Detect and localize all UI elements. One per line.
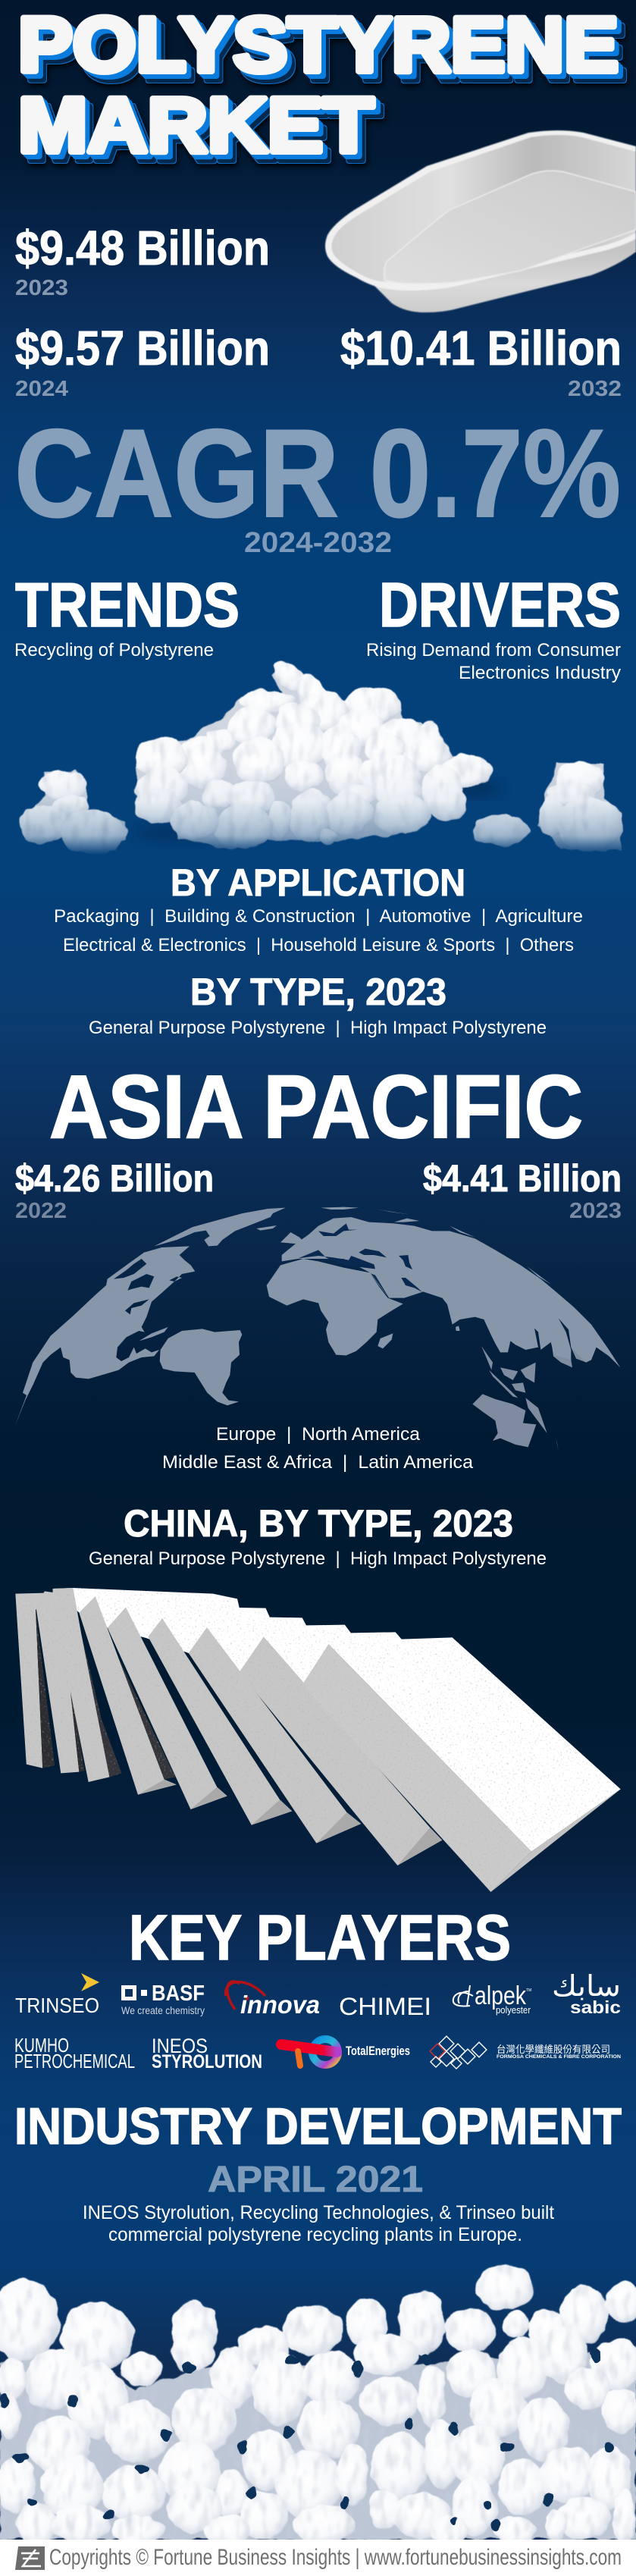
stat: 2024 market value	[15, 321, 270, 401]
stat: asia pacific 2022: 2022	[15, 1199, 67, 1223]
CAGR callout: 2024-2032	[244, 527, 392, 559]
stat: asia pacific 2023	[423, 1157, 622, 1223]
panel: trends	[14, 569, 240, 660]
logo: TotalEnergies: TotalEnergies	[346, 2044, 410, 2058]
logo: Kumho Petrochemical: KUMHO	[14, 2034, 69, 2057]
title: POLYSTYRENE	[18, 2, 619, 88]
logo: Kumho Petrochemical: PETROCHEMICAL	[14, 2050, 135, 2072]
image: pile of foam packing peanuts	[20, 655, 622, 855]
logo: Formosa Chemicals & Fibre: FORMOSA CHEMICALS & FIBRE CORPORATION	[497, 2054, 621, 2060]
logo: INEOS Styrolution: INEOS	[152, 2035, 208, 2057]
list: type segments: General Purpose Polystyrene | High Impact Polystyrene	[89, 1018, 547, 1038]
stat: 2023 market value	[15, 221, 270, 300]
logo: Alpek: polyester	[496, 2004, 531, 2016]
text block: development description: INEOS Styrolution, Recycling Technologies, & Trinseo built	[83, 2202, 554, 2223]
logo: Trinseo	[15, 1973, 99, 2017]
logo: Innova	[226, 1981, 320, 2019]
image: falling polystyrene boards	[15, 1588, 621, 1892]
image: world globe map	[15, 1207, 620, 1451]
list: china type segments: General Purpose Polystyrene | High Impact Polystyrene	[89, 1548, 547, 1569]
panel: trends: Recycling of Polystyrene	[14, 640, 214, 660]
footer: copyright bar	[0, 2540, 636, 2576]
heading: china by type: CHINA, BY TYPE, 2023	[124, 1502, 513, 1545]
title: MARKET	[18, 82, 374, 168]
logo: INEOS Styrolution	[152, 2035, 262, 2072]
stat: 2024 market value: $9.57 Billion	[15, 321, 270, 375]
list: application segments	[54, 906, 583, 955]
heading: by application: BY APPLICATION	[171, 861, 465, 904]
heading: by type: BY TYPE, 2023	[190, 971, 446, 1013]
image: foam packing peanuts strip	[0, 2264, 636, 2547]
logo: SABIC: sabic	[570, 1997, 621, 2017]
logo: SABIC	[552, 1969, 621, 2017]
list: other regions: Middle East & Africa | Latin America	[162, 1452, 473, 1473]
date: april 2021: APRIL 2021	[208, 2160, 423, 2200]
panel: drivers: Rising Demand from Consumer	[366, 640, 621, 660]
panel: drivers	[366, 569, 621, 683]
list: other regions	[162, 1424, 473, 1473]
list: application segments: Packaging | Building & Construction | Automotive | Agriculture	[54, 906, 583, 927]
title	[18, 2, 619, 168]
panel: trends: TRENDS	[15, 569, 240, 640]
icon: Fortune Business Insights logo	[15, 2546, 45, 2570]
heading: asia pacific: ASIA PACIFIC	[49, 1057, 583, 1157]
text block: development description	[83, 2202, 554, 2245]
stat: asia pacific 2022	[15, 1157, 214, 1223]
logo: BASF: We create chemistry	[121, 2004, 205, 2016]
logo: Innova: innova	[240, 1991, 320, 2019]
stat: 2023 market value: $9.48 Billion	[15, 221, 270, 275]
stat: 2023 market value: 2023	[15, 276, 68, 300]
logo: BASF: BASF	[152, 1981, 205, 2006]
logo: Alpek: TM	[526, 1988, 531, 1993]
text block: development description: commercial polystyrene recycling plants in Europe.	[108, 2224, 522, 2245]
logo: TotalEnergies	[281, 2039, 410, 2066]
stat: asia pacific 2022: $4.26 Billion	[15, 1157, 214, 1200]
stat: 2032 market value	[340, 321, 622, 401]
logo: Chimei: CHIMEI	[339, 1993, 431, 2020]
logo: Alpek: alpek	[475, 1981, 527, 2010]
stat: 2024 market value: 2024	[15, 377, 68, 401]
logo: BASF	[121, 1981, 205, 2016]
panel: drivers: Electronics Industry	[459, 663, 621, 683]
stat: 2032 market value: 2032	[568, 377, 622, 401]
image: white polystyrene tray	[325, 130, 636, 312]
logo: Trinseo: TRINSEO	[15, 1994, 99, 2017]
heading: key players: KEY PLAYERS	[129, 1902, 511, 1973]
list: application segments: Electrical & Electronics | Household Leisure & Sports | Others	[63, 935, 574, 955]
stat: asia pacific 2023: 2023	[569, 1199, 622, 1223]
logo: Formosa Chemicals & Fibre	[430, 2036, 621, 2069]
logo: Kumho Petrochemical	[14, 2034, 135, 2072]
logo: Formosa Chemicals & Fibre: 台灣化學纖維股份有限公司	[497, 2044, 610, 2055]
logo: SABIC: سابك	[552, 1969, 621, 2003]
logo: Alpek	[453, 1981, 531, 2016]
list: other regions: Europe | North America	[216, 1424, 420, 1445]
logo: INEOS Styrolution: STYROLUTION	[152, 2051, 262, 2072]
